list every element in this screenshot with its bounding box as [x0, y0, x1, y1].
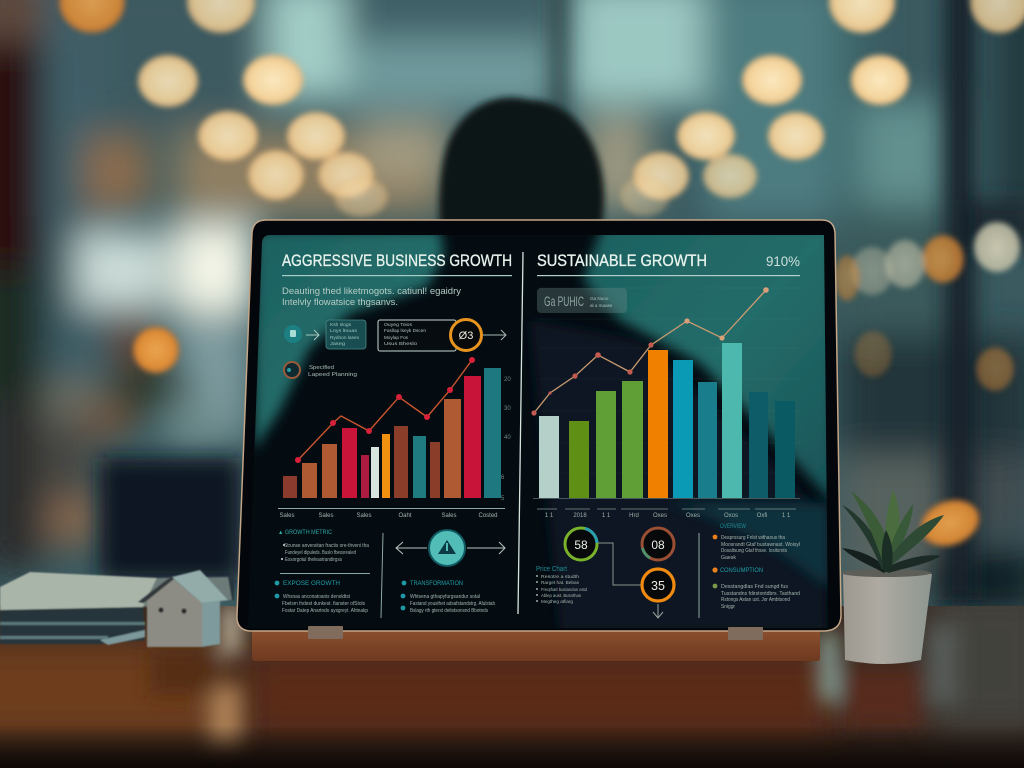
price chart notes: Resotre a studth — [541, 574, 579, 580]
dark note box — [378, 320, 456, 351]
centre divider — [518, 252, 523, 614]
screen background — [240, 225, 840, 632]
y axis labels: 5 — [501, 496, 505, 502]
x axis: 1 1 — [602, 513, 611, 519]
dark note box: Moylap Fos — [384, 335, 409, 340]
potted succulent — [841, 490, 944, 664]
x axis: Oxes — [686, 513, 700, 519]
right panel title: SUSTAINABLE GROWTH — [537, 252, 707, 270]
teal note box: Ksh slogs — [330, 322, 352, 327]
overview notes: Dosaltsung Gtaf thsse. Iositsrots — [721, 548, 787, 554]
bars — [539, 343, 795, 498]
bars — [283, 368, 501, 498]
price chart notes: Freqthatt bustandus ostd — [541, 587, 587, 593]
overview notes: CONSUMPTION — [720, 567, 763, 574]
gridlines — [540, 288, 800, 473]
public badge — [537, 288, 627, 313]
tablet clip right — [728, 627, 763, 640]
price chart notes: Price Chart — [536, 566, 567, 573]
x axis — [278, 508, 505, 519]
dark note box: Fasllap lseyk Dscen — [384, 328, 426, 333]
public badge: Ga Nuoo — [590, 296, 609, 301]
left panel title: AGGRESSIVE BUSINESS GROWTH — [282, 251, 512, 270]
dark note box: Ouyeg Toios — [384, 322, 413, 327]
overview notes: OVERVIEW — [720, 523, 747, 530]
left panel description — [282, 286, 461, 308]
x axis: 2018 — [573, 513, 587, 519]
headline percentage: 910% — [766, 254, 800, 269]
price chart notes: Rarget hat. Bebas — [541, 580, 580, 586]
y axis labels: 40 — [504, 435, 511, 441]
overview notes: Desstangdlas Fnd sungd fus — [721, 584, 789, 590]
stack of papers — [0, 572, 234, 645]
left column notes: Whsnas anconatoanis denoldtst — [283, 594, 351, 600]
public badge: Ga PUHIC — [544, 294, 584, 309]
overview notes: Deaprssurg Fnlst withaous tha — [721, 535, 785, 541]
y axis labels — [501, 377, 511, 502]
tablet stand — [252, 626, 820, 661]
house model — [138, 570, 228, 647]
donut metrics with connector — [565, 528, 674, 618]
left column notes: ▲ GROWTH METRIC — [278, 530, 333, 536]
small ring legend: Specified — [309, 365, 334, 371]
left panel description: Deauting thed liketmogots. catiunl! egaidry — [282, 286, 461, 297]
left column notes — [275, 530, 370, 614]
overview notes: Tusstandns fdirstontdbrs. Tasthand — [721, 591, 800, 597]
right column divider — [698, 533, 700, 618]
left panel description: Intelvly flowatsice thgsanvs. — [282, 297, 398, 308]
y axis labels: 30 — [504, 406, 511, 412]
overview notes — [712, 523, 800, 610]
left column notes: EXPOSE GROWTH — [283, 581, 340, 587]
x axis: Oaht — [398, 513, 412, 519]
teal note box: Jaseg — [330, 341, 346, 346]
transformation notes: Bslagy rth gterst deitstsonsnd Bbotnds — [410, 608, 488, 614]
left column notes: Fbelsm fndest dunkest. fianster ofStols — [282, 601, 365, 607]
small ring legend — [284, 362, 357, 378]
x axis: Sales — [318, 513, 334, 519]
dark note box: Usus Bheslo — [384, 341, 418, 346]
x axis: Oxos — [724, 513, 738, 519]
left column notes: Strunse anversitan fractis ore-thveni tha — [284, 543, 369, 549]
price chart notes — [536, 566, 587, 605]
trend line — [531, 287, 769, 416]
transformation notes: TRANSFORMATION — [410, 581, 463, 587]
x axis — [533, 498, 800, 519]
left column notes: Exsorgotul thelvastrandirgss — [285, 557, 342, 563]
teal note box: Lnys ltouas — [330, 328, 358, 333]
x axis: Oxes — [653, 513, 667, 519]
y axis labels: 20 — [504, 377, 511, 383]
donut 35: 35 — [651, 579, 665, 593]
price chart notes: Ablep aust. Busnthas — [541, 593, 582, 599]
tablet device — [237, 220, 841, 632]
x axis: Hrd — [629, 513, 639, 519]
overview notes: Moosrandt Gtaf bustawnast. Woisyl — [721, 542, 800, 548]
wooden table — [0, 590, 1024, 768]
plant leaves — [842, 490, 944, 573]
price chart notes: Megtheg atfiarg — [541, 599, 573, 605]
process flow — [284, 320, 506, 351]
y axis labels: 6 — [501, 475, 505, 481]
tablet clip left — [308, 626, 343, 639]
x axis: 1 1 — [782, 513, 791, 519]
overview notes: Sniggr — [721, 604, 735, 610]
right bar chart — [531, 287, 800, 519]
teal start icon — [284, 325, 302, 343]
overview notes: Gaesk — [721, 555, 737, 561]
donut 08: 08 — [651, 538, 665, 552]
x axis: 1 1 — [545, 513, 554, 519]
transformation notes: Whtsena gthapyfurgsandur sotal — [410, 594, 480, 600]
x axis: Sales — [356, 513, 372, 519]
blurred person silhouette — [440, 98, 604, 225]
orange ring value: Ø3 — [459, 330, 473, 342]
left column notes: Fundeyel dipuleds. Buslo fbessrealed — [285, 550, 356, 556]
centre triangle icon with arrows — [396, 530, 505, 566]
left column divider — [381, 533, 383, 618]
bokeh lights — [59, 0, 1024, 554]
left bar chart — [278, 357, 511, 519]
public badge: al a maase — [590, 303, 613, 308]
overview notes: Rstongs Astan ust. Jor Ambtsond — [721, 597, 790, 603]
x axis: Costed — [478, 513, 498, 519]
donut 58: 58 — [574, 538, 588, 552]
small ring legend: Lapeed Planning — [308, 372, 357, 378]
transformation notes: Fastand yousthet adsafstandstrg. Afulstab — [410, 601, 495, 607]
x axis: Sales — [279, 513, 295, 519]
trend line — [295, 357, 475, 463]
teal note box: Rydnon lases — [330, 335, 360, 340]
left column notes: Fostar Datep Anartndo aysgreyt. Ahtnakp — [282, 608, 368, 614]
orange ring value — [450, 320, 482, 350]
teal note box — [326, 320, 366, 349]
x axis: Oxfi — [757, 513, 767, 519]
transformation notes — [401, 581, 495, 614]
pot — [841, 569, 932, 664]
x axis: Sales — [441, 513, 457, 519]
